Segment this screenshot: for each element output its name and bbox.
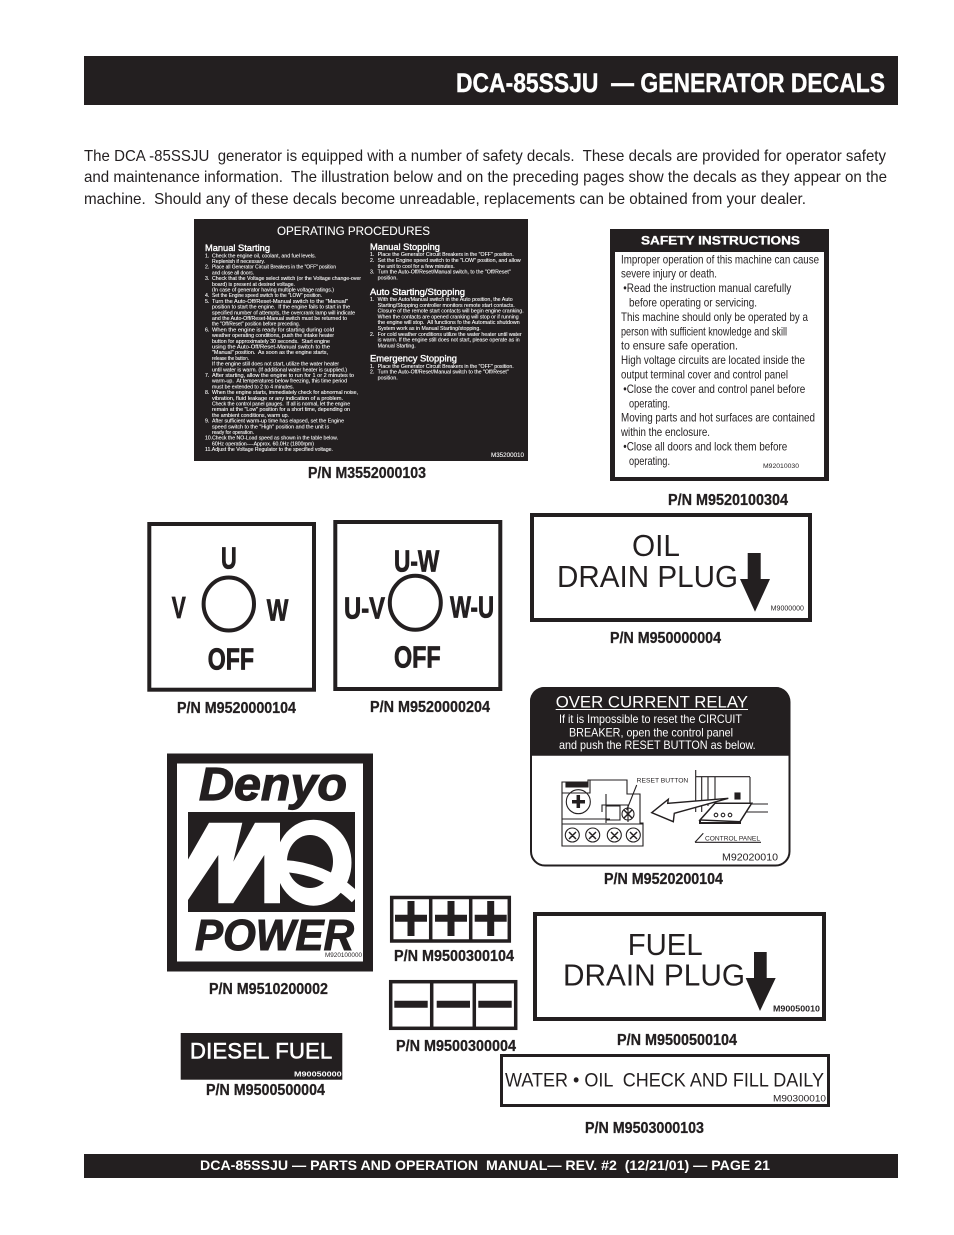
decal: operating procedures: Closure of the remote start contacts will begin engine cranking. [378, 309, 524, 315]
decal: diesel fuel: DIESEL FUEL [190, 1039, 332, 1064]
decal: safety instructions: within the enclosure. [620, 425, 710, 439]
decal: safety instructions: severe injury or death. [621, 267, 717, 281]
decal: safety instructions: M92010030 [763, 463, 799, 470]
decal: operating procedures: Place all Generator Circuit Breakers in the "OFF" position [212, 265, 336, 271]
decal: safety instructions: •Close all doors and lock them before [623, 440, 788, 454]
decal: safety instructions: This machine should only be operated by a [621, 310, 808, 324]
decal: U-W U-V W-U selector: U-W [394, 544, 440, 579]
decal: operating procedures: Check the engine oil, coolant, and fuel levels. [212, 253, 316, 259]
footer banner: DCA-85SSJU — PARTS AND OPERATION MANUAL— REV. #2 (12/21/01) — PAGE 21 [200, 1157, 770, 1173]
decal: operating procedures: System work as in Manual Starting/stopping. [378, 326, 481, 332]
decal: operating procedures: Check that the Voltage select switch (or the Voltage change-over [212, 276, 361, 282]
decal: U-W U-V W-U selector [335, 522, 500, 689]
decal: operating procedures: release the button. [212, 356, 249, 362]
decal: operating procedures: specified number of attempts, the overcrank lamp will indicate [212, 310, 355, 316]
decal: safety instructions: •Close the cover and control panel before [623, 382, 806, 396]
part number: oil drain plug: P/N M950000004 [610, 630, 721, 647]
decal: operating procedures: 2. [370, 258, 374, 264]
decal: operating procedures: OPERATING PROCEDURES [277, 224, 430, 238]
intro paragraph: and maintenance information. The illustration below and on the preceding pages show the decals as they appear on the [84, 169, 887, 186]
part number: minus signs: P/N M9500300004 [396, 1038, 516, 1055]
decal: operating procedures: the engine will stop. All functions fo the Automatic shutdown [378, 320, 520, 326]
decal: operating procedures: 2. [370, 332, 374, 338]
decal: operating procedures: After sufficient warm-up time has elapsed, set the Engine [212, 419, 344, 425]
part number: over current relay: P/N M9520200104 [604, 871, 723, 888]
decal: operating procedures: position to start the engine. If the engine fails to start in the [212, 305, 350, 311]
decal: operating procedures: For cold weather conditions utilize the water heater until water [378, 332, 522, 338]
decal: operating procedures: Manual Starting. [378, 343, 416, 349]
decal: operating procedures: With the Auto/Manual switch in the Auto position, the Auto [378, 297, 513, 303]
decal: operating procedures: Emergency Stopping [370, 354, 457, 364]
decal: operating procedures: When the engine is ready for starting during cold [212, 327, 334, 333]
decal: operating procedures: 5. [205, 299, 209, 305]
decal: operating procedures: the unit to cool for a few minutes. [378, 264, 455, 270]
decal: safety instructions: before operating or servicing. [629, 296, 757, 310]
decal: operating procedures: until water is warm. (If additional water heater is supplied.) [212, 367, 347, 373]
decal: water oil check: WATER • OIL CHECK AND FILL DAILY [505, 1071, 824, 1092]
decal: operating procedures: M35200010 [491, 452, 524, 459]
decal: operating procedures: button for approximately 30 seconds. Start engine [212, 339, 330, 345]
part number: Denyo logo: P/N M9510200002 [209, 981, 328, 998]
decal: operating procedures: Set the Engine speed switch to the "LOW" position, and allow [378, 258, 521, 264]
decal: over current relay: BREAKER, open the control panel [569, 726, 733, 740]
decal: operating procedures: Turn the Auto-Off/Reset/Manual switch to the "Off/Reset" [378, 370, 509, 376]
decal: operating procedures: After starting, allow the engine to run for 1 or 2 minutes to [212, 373, 354, 379]
decal: operating procedures: 11.Adjust the Voltage Regulator to the specified voltage. [205, 447, 333, 453]
decal: U V W selector: W [267, 593, 289, 628]
decal: oil drain plug: OIL [632, 528, 680, 563]
decal: operating procedures: using the Auto-Off/Reset-Manual switch to the [212, 344, 330, 350]
part number: fuel drain plug: P/N M9500500104 [617, 1032, 737, 1049]
decal: safety instructions: Moving parts and hot surfaces are contained [621, 411, 815, 425]
part number: U V W selector: P/N M9520000104 [177, 700, 296, 717]
decal: oil drain plug: DRAIN PLUG [557, 559, 738, 594]
decal: water oil check: M90300010 [773, 1094, 826, 1104]
part number: diesel fuel: P/N M9500500004 [206, 1082, 325, 1099]
decal: operating procedures: 9. [205, 419, 209, 425]
decal: operating procedures: 1. [370, 252, 374, 258]
decal: operating procedures: If the engine still does not start, utilize the water heater [212, 362, 339, 368]
decal: safety instructions: operating. [629, 454, 670, 468]
decal: water oil check [502, 1056, 828, 1106]
decal: over current relay: and push the RESET BUTTON as below. [559, 738, 756, 752]
decal: Denyo MQ Power logo: Denyo [199, 758, 347, 810]
decal: oil drain plug [532, 515, 810, 620]
decal: operating procedures: 3. [370, 270, 374, 276]
decal: over current relay: OVER CURRENT RELAY [556, 693, 748, 712]
decal: Denyo MQ Power logo [172, 758, 368, 966]
decal: fuel drain plug: M90050010 [773, 1005, 821, 1014]
decal: operating procedures: 1. [370, 297, 374, 303]
decal: operating procedures: 10.Check the NO-Load speed as shown in the table below. [205, 436, 338, 442]
decal: operating procedures: Turn the Auto-Off/Reset-Manual switch to the "Manual" [212, 299, 348, 305]
decal: operating procedures: Starting/Stopping controller monitors remote start contacts. [378, 303, 515, 309]
decal: U V W selector: U [221, 540, 237, 575]
decal: fuel drain plug: FUEL [628, 927, 703, 962]
decal: operating procedures: Place the Generator Circuit Breakers in the "OFF" position. [378, 364, 514, 370]
part number: U-W selector: P/N M9520000204 [370, 699, 490, 716]
decal: operating procedures: board) is present at desired voltage. [212, 282, 295, 288]
decal: operating procedures: the ambient conditions, warm up. [212, 413, 289, 419]
decal: operating procedures: 1. [370, 364, 374, 370]
decal: operating procedures: and the Auto-Off/Reset-Manual switch must be returned to [212, 316, 347, 322]
decal: operating procedures: 1. [205, 253, 209, 259]
decal: operating procedures: warm-up. At temperatures below freezing, this time period [212, 379, 347, 385]
decal: fuel drain plug [535, 914, 824, 1019]
decal: diesel fuel: M90050000 [294, 1069, 342, 1078]
decal: safety instructions: •Read the instruction manual carefully [623, 281, 791, 295]
decal: operating procedures: 3. [205, 276, 209, 282]
decal: safety instructions [610, 229, 829, 481]
decal: over current relay: M92020010 [722, 853, 778, 864]
decal: operating procedures: weather operating conditions, push the intake heater [212, 333, 334, 339]
decal: U V W selector: OFF [208, 641, 254, 676]
decal: safety instructions: High voltage circuits are located inside the [621, 353, 805, 367]
decal: oil drain plug: M9000000 [771, 606, 804, 613]
decal: over current relay: RESET BUTTON [637, 778, 689, 785]
decal: operating procedures: Auto Starting/Stopping [370, 287, 465, 297]
decal: U V W selector: V [172, 590, 186, 625]
decal: operating procedures: Turn the Auto-Off/Reset/Manual switch, to the "Off/Reset" [378, 270, 511, 276]
decal: operating procedures: 8. [205, 390, 209, 396]
decal: operating procedures: Check the control panel gauges. If all is normal, let the engine [212, 402, 350, 408]
decal: safety instructions: to ensure safe operation. [621, 339, 738, 353]
decal: operating procedures: 4. [205, 293, 209, 299]
decal: diesel fuel [181, 1033, 342, 1080]
decal: fuel drain plug: DRAIN PLUG [563, 958, 745, 993]
decal: operating procedures: Place the Generator Circuit Breakers in the "OFF" position. [378, 252, 514, 258]
decal: U-W U-V W-U selector: U-V [344, 590, 385, 625]
decal: operating procedures: must be extended to 2 to 4 minutes. [212, 384, 294, 390]
decal: operating procedures: 7. [205, 373, 209, 379]
decal: operating procedures: Set the Engine speed switch to the "LOW" position. [212, 293, 322, 299]
decal: U-W U-V W-U selector: OFF [394, 640, 441, 675]
decal: operating procedures: 60Hz operation----Approx. 60.0Hz (1800rpm) [212, 441, 314, 447]
decal: U-W U-V W-U selector: W-U [450, 589, 494, 624]
decal: safety instructions: output terminal cover and control panel [621, 368, 788, 382]
decal: operating procedures: vibration, fluid leakage or any indication of a problem. [212, 396, 343, 402]
decal: minus signs [391, 981, 516, 1029]
decal: operating procedures: is warm. If the engine still does not start, please operate as in [378, 338, 520, 344]
decal: over current relay: If it is Impossible to reset the CIRCUIT [559, 712, 743, 726]
decal: operating procedures: 2. [370, 370, 374, 376]
decal: operating procedures: 2. [205, 265, 209, 271]
decal: operating procedures: position. [378, 376, 398, 382]
decal: U V W selector [149, 524, 314, 690]
decal: plus signs [392, 897, 509, 941]
decal: safety instructions: operating. [629, 396, 670, 410]
relay diagram [562, 770, 768, 846]
header banner: DCA-85SSJU — GENERATOR DECALS [456, 68, 885, 98]
intro paragraph [84, 148, 887, 208]
decal: operating procedures: the "Off/Reset" position before preceding. [212, 322, 300, 328]
intro paragraph: The DCA -85SSJU generator is equipped with a number of safety decals. These decals are provided for operator safety [84, 148, 886, 165]
decal: operating procedures: ready for operation. [212, 430, 254, 436]
part number: plus signs: P/N M9500300104 [394, 948, 514, 965]
part number: water oil check: P/N M9503000103 [585, 1120, 704, 1137]
intro paragraph: machine. Should any of these decals become unreadable, replacements can be obtained from your dealer. [84, 191, 806, 208]
header banner [84, 56, 898, 105]
decal: operating procedures: When the contacts are opened cranking will stop or if running [378, 314, 519, 320]
decal: operating procedures: Replenish if necessary. [212, 259, 265, 265]
decal: operating procedures: 6. [205, 327, 209, 333]
decal: operating procedures: Manual Starting [205, 243, 270, 253]
part number: operating procedures: P/N M3552000103 [308, 465, 426, 482]
decal: safety instructions: Improper operation of this machine can cause [621, 252, 819, 266]
decal: over current relay: CONTROL PANEL [705, 836, 760, 843]
decal: operating procedures: When the engine starts, immediately check for abnormal noise, [212, 390, 358, 396]
decal: over current relay [530, 687, 790, 866]
decal: Denyo MQ Power logo: M920100000 [325, 953, 363, 959]
decal: operating procedures: (In case of generator having multiple voltage ratings.) [212, 288, 334, 294]
decal: operating procedures: position. [378, 276, 398, 282]
part number: safety instructions: P/N M9520100304 [668, 492, 788, 509]
decal: safety instructions: SAFETY INSTRUCTIONS [641, 236, 800, 248]
decal: operating procedures: and close all doors. [212, 270, 254, 276]
decal: operating procedures [194, 219, 528, 461]
decal: operating procedures: speed switch to the "High" position and the unit is [212, 424, 329, 430]
decal: operating procedures: Manual Stopping [370, 242, 440, 252]
decal: operating procedures: "Manual" position. As soon as the engine starts, [212, 350, 328, 356]
decal: operating procedures: remain at the "Low" position for a short time, depending on [212, 407, 350, 413]
footer banner [84, 1154, 898, 1178]
decal: safety instructions: person with sufficient knowledge and skill [621, 324, 787, 338]
decal: Denyo MQ Power logo: POWER [195, 911, 354, 960]
